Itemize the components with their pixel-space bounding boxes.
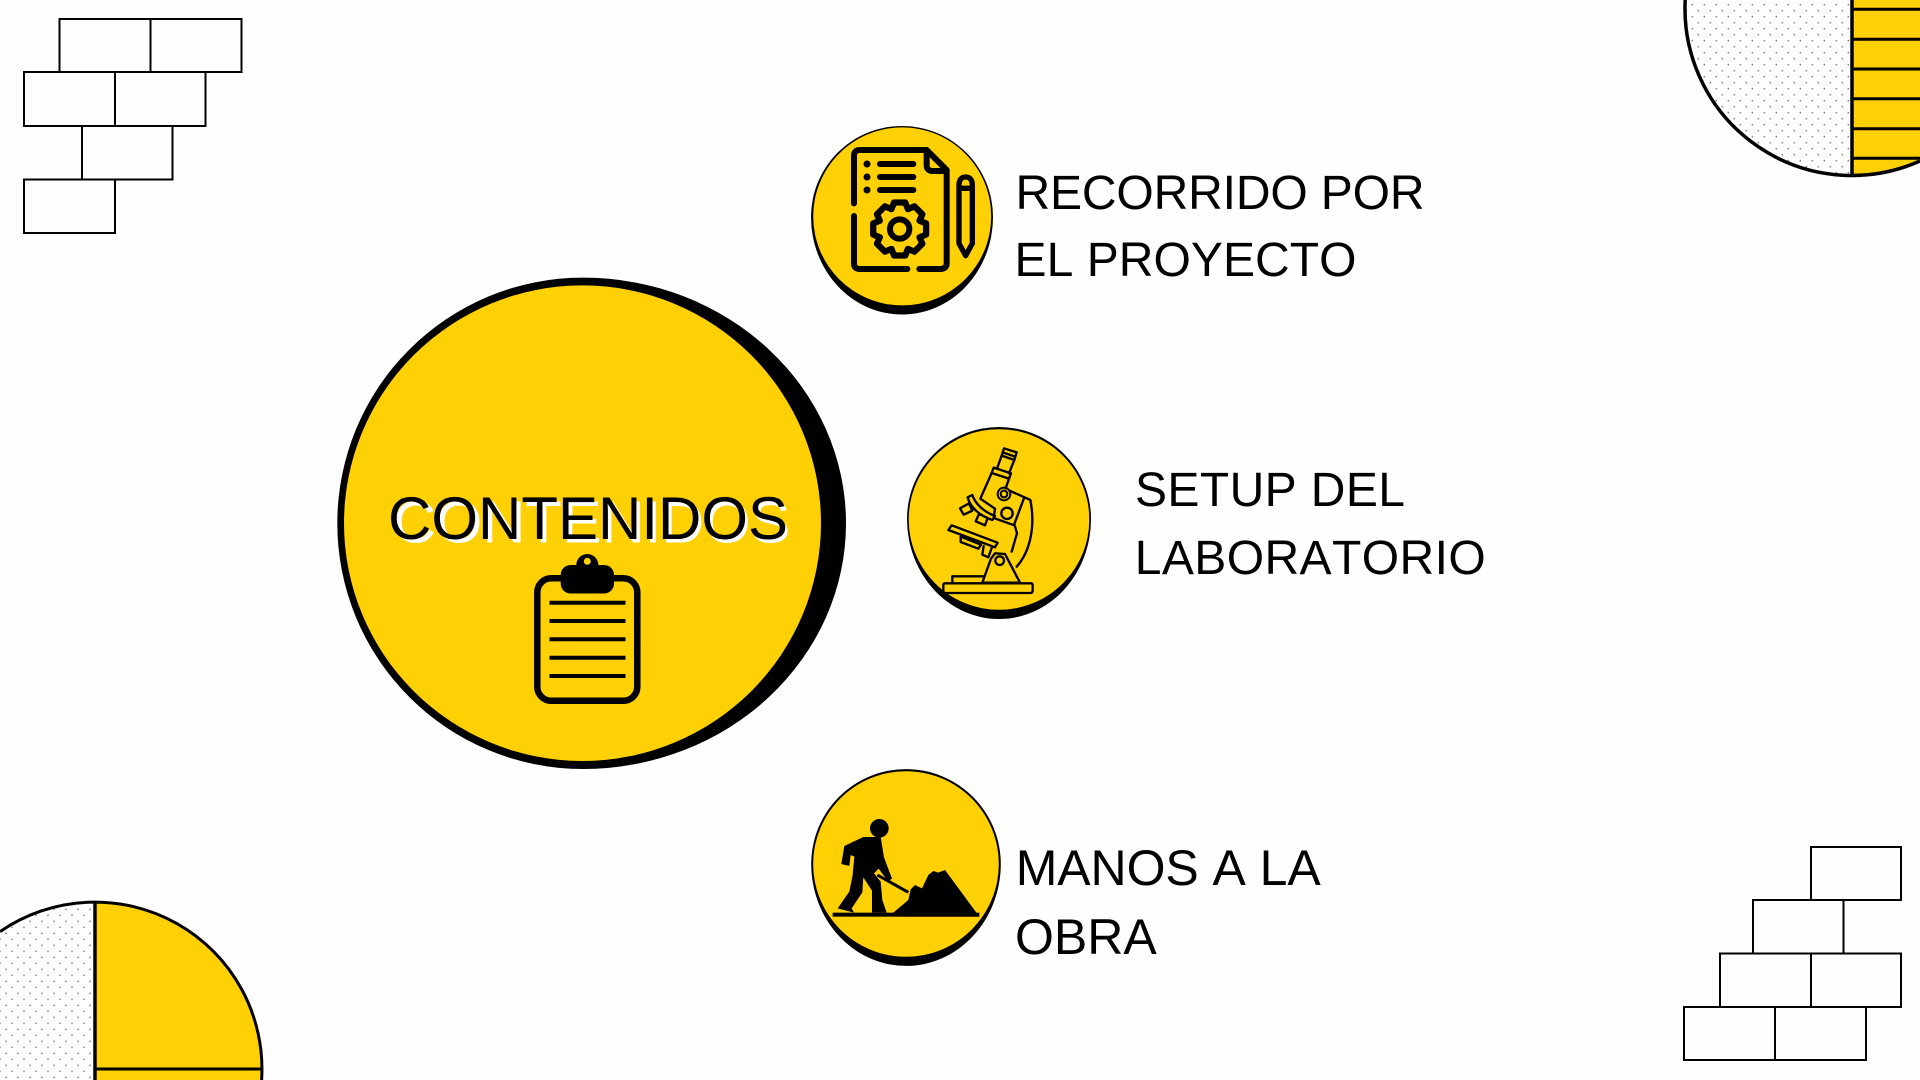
decoration: bricks top left <box>24 19 242 233</box>
item: setup del laboratorio <box>907 427 1486 619</box>
item: recorrido por el proyecto <box>811 126 1424 314</box>
label: recorrido por el proyecto: EL PROYECTO <box>1014 234 1356 287</box>
item circle 3 <box>811 769 1001 966</box>
heading: CONTENIDOS <box>388 485 788 552</box>
icon: document with gear and pencil <box>854 150 972 269</box>
main circle panel <box>337 278 846 769</box>
label: setup del laboratorio: SETUP DEL <box>1135 464 1405 517</box>
icon: microscope <box>943 448 1033 593</box>
decoration: half circle bottom left <box>0 902 262 1080</box>
circle shadow <box>337 278 846 769</box>
label: recorrido por el proyecto: RECORRIDO POR <box>1016 167 1424 220</box>
label: manos a la obra: MANOS A LA <box>1016 840 1321 896</box>
icon: clipboard <box>537 554 637 701</box>
label: manos a la obra: OBRA <box>1015 909 1157 965</box>
decoration: half circle top right <box>1685 0 1920 176</box>
decoration: bricks bottom right <box>1684 847 1901 1060</box>
item circle 2 <box>907 427 1091 619</box>
item circle 1 <box>811 126 993 314</box>
icon: worker shoveling <box>833 819 979 917</box>
heading shadow: CONTENIDOS <box>393 488 790 556</box>
item: manos a la obra <box>811 769 1321 966</box>
label: setup del laboratorio: LABORATORIO <box>1135 532 1486 585</box>
circle face <box>344 285 821 761</box>
